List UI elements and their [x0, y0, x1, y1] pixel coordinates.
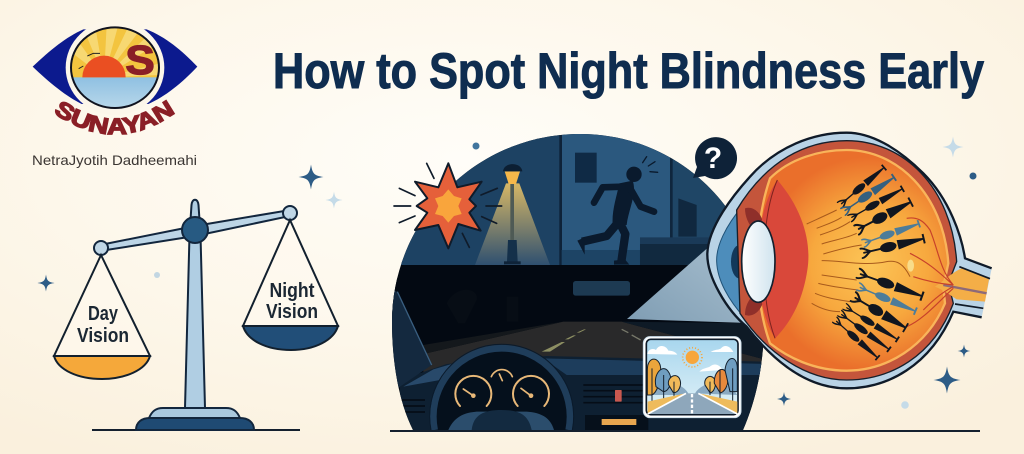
ground line [92, 429, 300, 431]
daytime inset picture [643, 337, 741, 418]
pan: day vision: Vision [77, 324, 129, 347]
nerve fibres [807, 210, 910, 312]
road surface [423, 322, 767, 380]
decorative stars [38, 136, 976, 409]
vitreous crescent [758, 180, 808, 338]
hills [647, 383, 737, 395]
night street backdrop [401, 134, 726, 265]
building window [575, 153, 597, 183]
retinal veins [907, 218, 953, 327]
inner globe [737, 141, 957, 380]
rearview mirror [573, 281, 630, 296]
trees [647, 359, 737, 405]
logo letter S: S [125, 37, 155, 83]
driver view: road and cabin [378, 278, 780, 431]
pan: night vision: Night [270, 279, 315, 302]
dashboard [400, 356, 767, 431]
photoreceptor rods and cones [833, 165, 925, 360]
pan: night vision [243, 220, 338, 350]
sclera [707, 133, 992, 388]
ground line under scene [390, 430, 980, 432]
question mark bubble [693, 137, 737, 179]
clouds [647, 346, 733, 372]
ciliary body [745, 208, 764, 316]
panel: night driving dome scene [378, 130, 780, 432]
optic disc [907, 260, 914, 272]
pan: night vision: Vision [266, 300, 318, 323]
scale beam [100, 210, 290, 251]
steering wheel [430, 344, 574, 430]
logo wordmark: SUNAYAN [54, 100, 176, 135]
radio strip [602, 419, 636, 425]
light beam from eye to scene [627, 237, 748, 323]
eye cross-section [707, 133, 992, 388]
logo: Sunayan eye [32, 26, 198, 135]
silhouette: stumbling pedestrian [577, 157, 658, 265]
lens [742, 221, 775, 302]
logo tagline: NetraJyotih Dadheemahi [32, 152, 197, 168]
optic nerve [935, 267, 990, 308]
starburst glare [394, 163, 502, 248]
beam ends [94, 241, 108, 255]
pivot [182, 217, 208, 243]
gauges [455, 370, 549, 406]
pan: day vision: Day [88, 302, 118, 325]
scale pole [185, 200, 205, 408]
air vent [402, 385, 643, 412]
lane markings [542, 329, 586, 352]
scale base [136, 418, 254, 430]
question mark bubble: ? [704, 142, 722, 175]
a-pillar [392, 290, 432, 388]
balance scale [54, 200, 338, 430]
sun [683, 348, 702, 367]
retina layer [757, 150, 948, 371]
hazard button [615, 390, 622, 402]
sunny road [648, 393, 737, 414]
street lamp [475, 164, 550, 265]
pan: day vision [54, 255, 150, 379]
cornea and iris [717, 205, 748, 318]
